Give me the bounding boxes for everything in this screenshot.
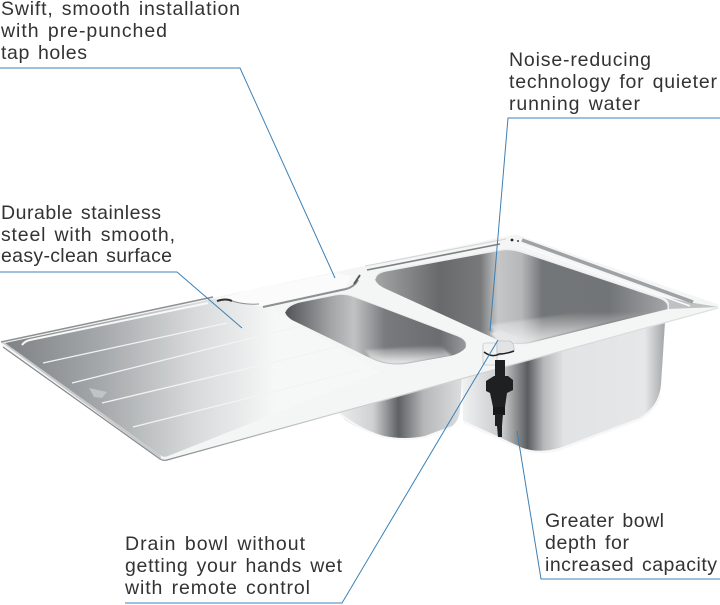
callout: surface: Durable stainless xyxy=(1,202,161,224)
callout: surface: steel with smooth, xyxy=(1,224,175,246)
large bowl underside xyxy=(462,322,665,452)
top rim xyxy=(365,239,693,306)
small bowl interior xyxy=(285,294,466,364)
sink top deck xyxy=(1,234,719,460)
remote drain valve xyxy=(486,360,513,437)
callout: remote drain: Drain bowl without xyxy=(125,533,306,555)
callout: bowl depth: increased capacity xyxy=(545,554,717,576)
left edge shading xyxy=(1,342,162,460)
callout: remote drain: getting your hands wet xyxy=(125,555,343,577)
callout: noise reduction xyxy=(490,49,720,331)
drain overflow cap xyxy=(483,331,520,365)
callout: installation: tap holes xyxy=(1,42,87,64)
callout: installation xyxy=(0,0,335,278)
callout: surface: easy-clean surface xyxy=(1,245,172,267)
deck front edge xyxy=(3,308,718,460)
callout: bowl depth: depth for xyxy=(545,532,630,554)
sink illustration xyxy=(1,234,719,460)
draining board xyxy=(5,299,380,457)
top edge shading xyxy=(1,297,213,342)
callout: bowl depth xyxy=(517,431,720,579)
small bowl underside xyxy=(337,378,462,439)
drainer ribs xyxy=(43,323,360,427)
large bowl interior xyxy=(375,249,668,344)
callout: noise reduction: technology for quieter xyxy=(509,71,718,93)
rim highlight xyxy=(22,303,208,345)
callout: bowl depth: Greater bowl xyxy=(545,510,664,532)
callout: remote drain xyxy=(124,340,498,603)
tap hole plate xyxy=(214,273,360,307)
right rim corner xyxy=(660,296,718,309)
callout: surface xyxy=(0,202,242,328)
logo mark xyxy=(89,388,107,398)
callout: installation: with pre-punched xyxy=(0,20,167,42)
callout: noise reduction: Noise-reducing xyxy=(509,49,651,71)
callout: remote drain: with remote control xyxy=(124,577,310,599)
callout: noise reduction: running water xyxy=(509,93,640,115)
